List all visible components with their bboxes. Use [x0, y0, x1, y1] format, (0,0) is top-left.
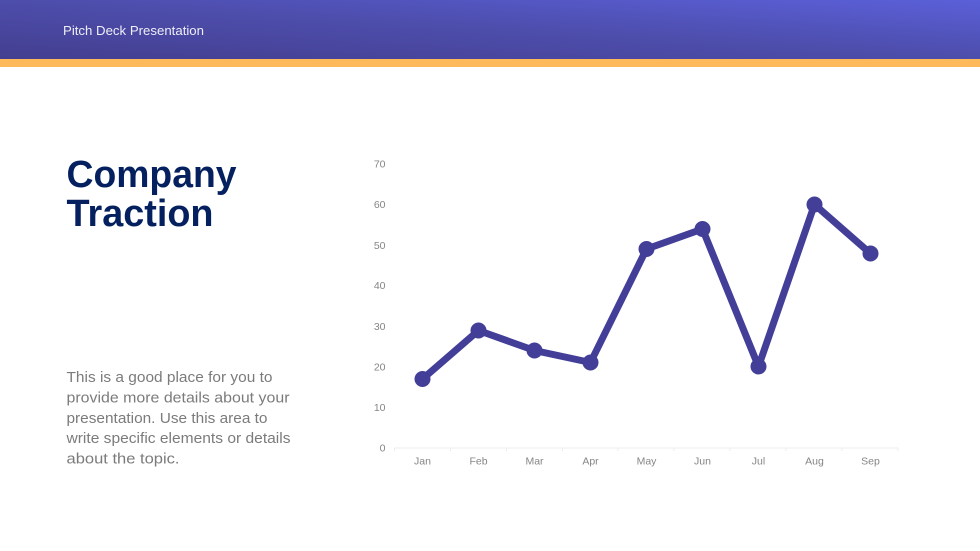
x axis labels: Apr [582, 456, 599, 468]
description text: about the topic. [66, 450, 180, 468]
x axis labels: Aug [805, 456, 824, 468]
x axis labels [414, 456, 880, 468]
x axis labels: Mar [525, 456, 544, 468]
heading: Company Traction [66, 154, 236, 235]
data points [414, 196, 878, 387]
y axis labels [374, 158, 386, 454]
y axis labels: 50 [374, 240, 386, 252]
y axis labels: 70 [374, 158, 386, 170]
line chart [374, 158, 898, 468]
description text: This is a good place for you to [66, 369, 272, 386]
y axis labels: 10 [374, 402, 386, 414]
x axis labels: May [637, 456, 657, 468]
y axis labels: 30 [374, 321, 386, 333]
description text: presentation. Use this area to [66, 410, 268, 427]
x axis labels: Sep [861, 456, 880, 468]
heading: Company Traction: Company [66, 154, 236, 196]
y axis labels: 60 [374, 199, 386, 211]
header band [0, 0, 980, 59]
description text: write specific elements or details [65, 430, 290, 447]
x axis line [394, 448, 898, 451]
heading: Company Traction: Traction [66, 193, 214, 235]
data line [422, 204, 870, 379]
orange accent bar [0, 59, 980, 67]
x axis labels: Jan [414, 456, 431, 468]
x axis labels: Jul [752, 456, 765, 468]
x axis labels: Jun [694, 456, 711, 468]
y axis labels: 20 [374, 362, 386, 374]
description text [65, 369, 290, 468]
y axis labels: 40 [374, 280, 386, 292]
y axis labels: 0 [380, 442, 386, 454]
x axis labels: Feb [469, 456, 488, 468]
header title: Pitch Deck Presentation [63, 23, 204, 38]
description text: provide more details about your [66, 390, 290, 406]
